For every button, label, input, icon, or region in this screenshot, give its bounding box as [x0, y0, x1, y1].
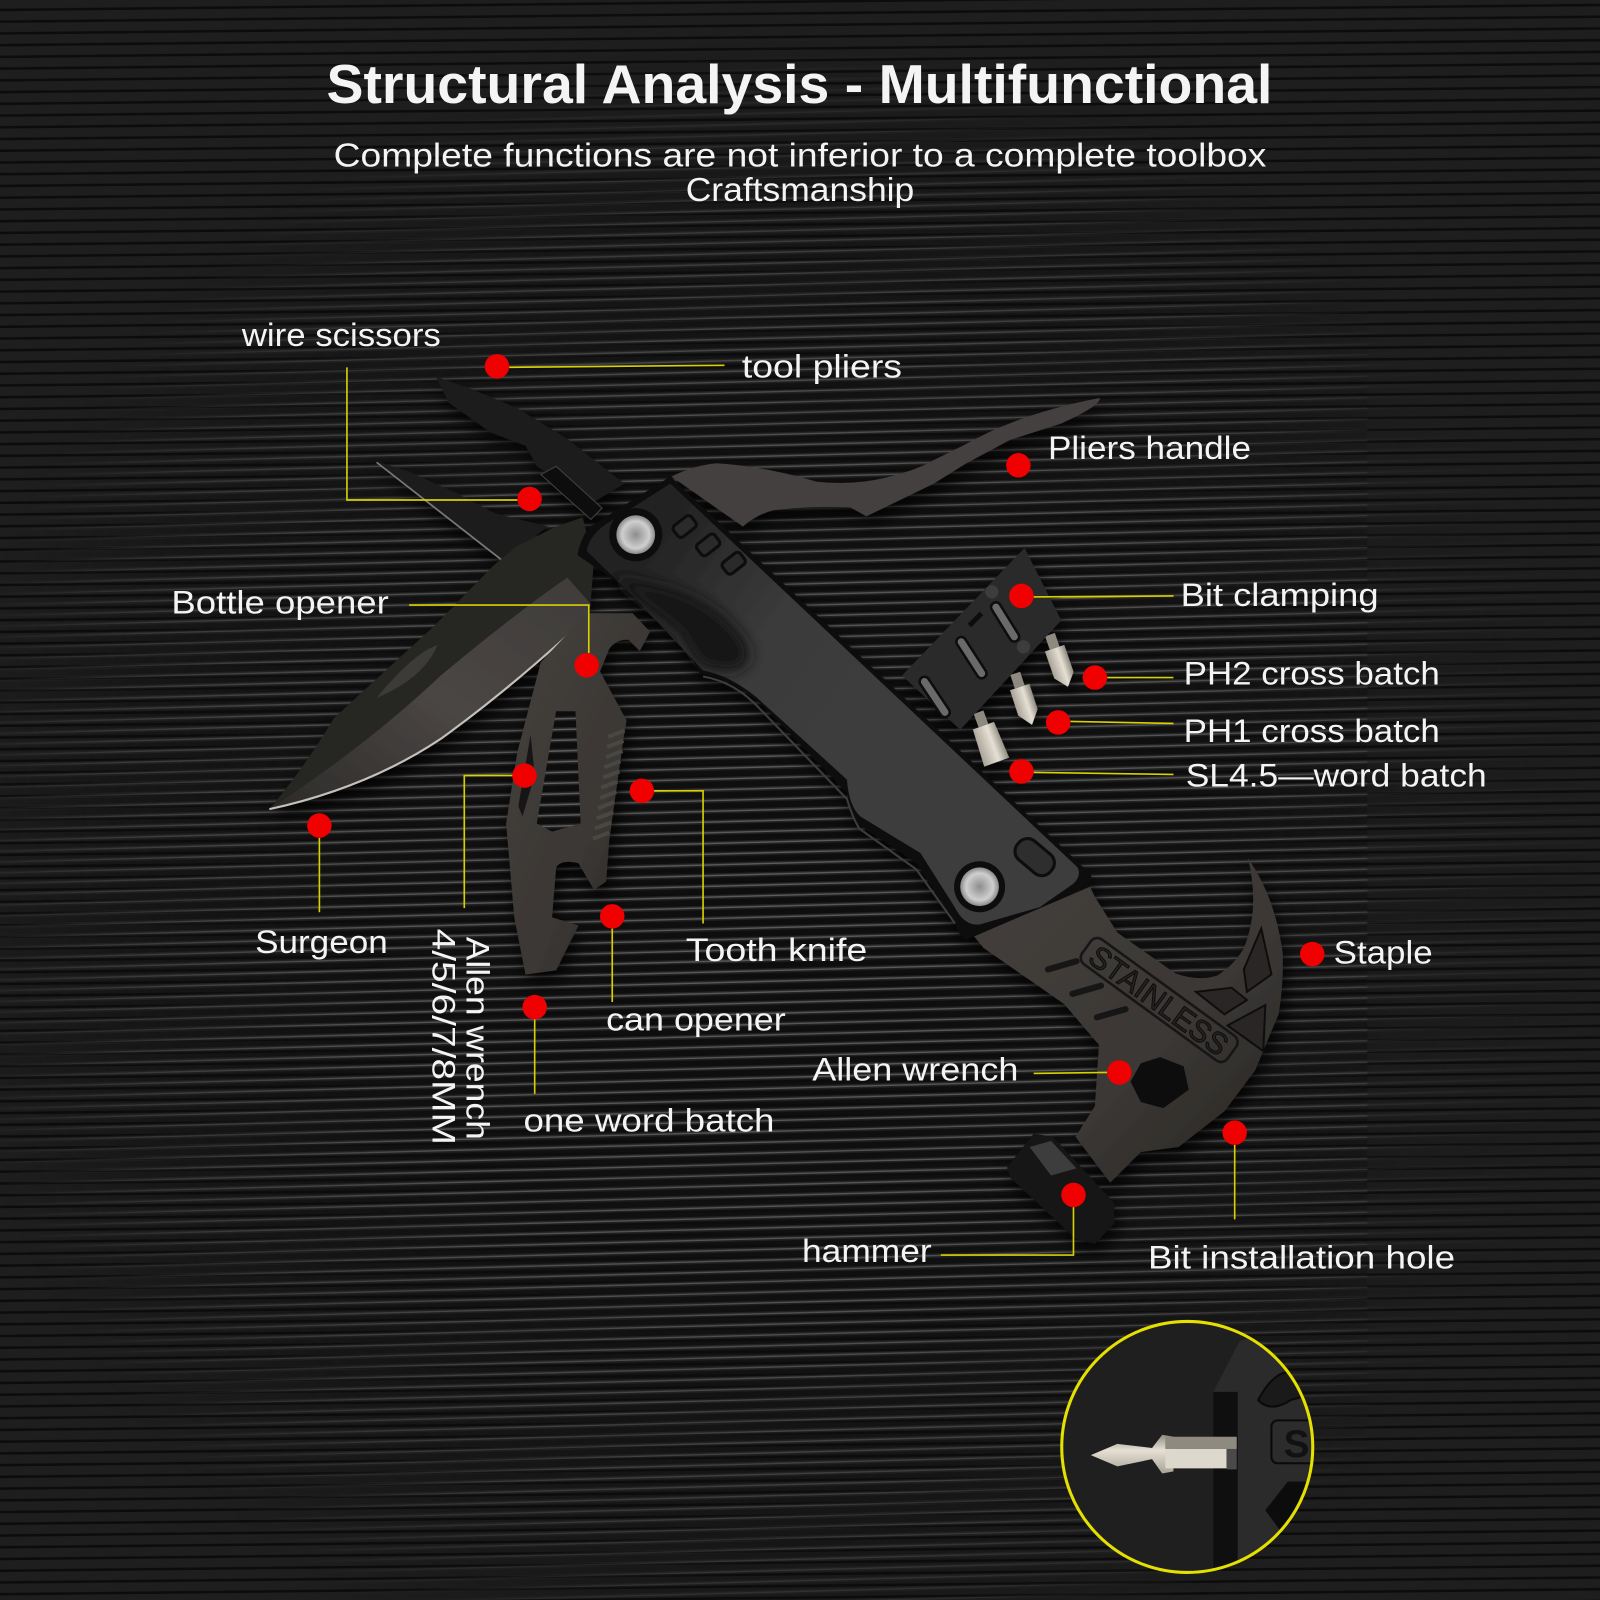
pliers lower jaw [377, 461, 548, 560]
part labels: PH1 cross batch [1184, 712, 1440, 749]
part labels: Tooth knife [686, 931, 867, 968]
pliers upper jaw [436, 377, 624, 519]
subtitle [334, 137, 1267, 209]
subtitle: Complete functions are not inferior to a complete toolbox [334, 137, 1267, 174]
SL bit [966, 708, 1009, 767]
part labels [171, 316, 1487, 1275]
leader lines [319, 365, 1235, 1255]
subtitle: Craftsmanship [686, 172, 914, 209]
claw recesses [1196, 929, 1271, 1051]
part labels: SL4.5—word batch [1186, 757, 1487, 794]
part labels: Staple [1334, 933, 1433, 970]
tool end [1214, 1339, 1310, 1560]
part labels: 4/5/6/7/8MM [426, 929, 463, 1145]
multi-function tool arm [506, 613, 650, 974]
part labels: wire scissors [241, 316, 441, 353]
bit holder [902, 548, 1078, 767]
hex hole [1266, 1482, 1306, 1530]
part labels: Pliers handle [1048, 429, 1251, 466]
part labels: Bit installation hole [1148, 1238, 1455, 1275]
part labels: one word batch [523, 1102, 774, 1139]
screw bit [1091, 1435, 1173, 1473]
grip slots [671, 514, 747, 576]
part labels: Bottle opener [171, 583, 389, 620]
part labels: Allen wrench [812, 1051, 1018, 1088]
stainless plate: STAINLESS [1082, 939, 1234, 1063]
serrated tooth knife [593, 731, 624, 839]
pliers handle [671, 398, 1100, 527]
part labels: Allen wrench [459, 937, 496, 1140]
PH2 bit [1040, 631, 1078, 690]
hammer and claw head [969, 858, 1283, 1183]
part labels: PH2 cross batch [1184, 655, 1440, 692]
badge S [1270, 1419, 1310, 1464]
multitool illustration [269, 377, 1283, 1244]
title: Structural Analysis - Multifunctional [327, 53, 1272, 115]
PH1 bit [1006, 670, 1042, 728]
red marker dots [307, 354, 1324, 1207]
vents [1048, 961, 1126, 1017]
oblong recess [1010, 834, 1059, 880]
part labels: hammer [802, 1232, 932, 1269]
part labels: can opener [606, 1001, 786, 1038]
handle body [578, 477, 1092, 940]
part labels: tool pliers [742, 348, 902, 385]
bottom screw [954, 861, 1005, 912]
hex hole [1131, 1057, 1189, 1108]
part labels: Surgeon [255, 923, 388, 960]
inset: bit in installation hole: S [1284, 1423, 1310, 1466]
knife blade [269, 517, 594, 809]
top screw [609, 508, 662, 561]
part labels: Bit clamping [1181, 576, 1379, 613]
hammer cylinder head [1007, 1134, 1114, 1244]
inset: bit in installation hole [1062, 1316, 1333, 1582]
